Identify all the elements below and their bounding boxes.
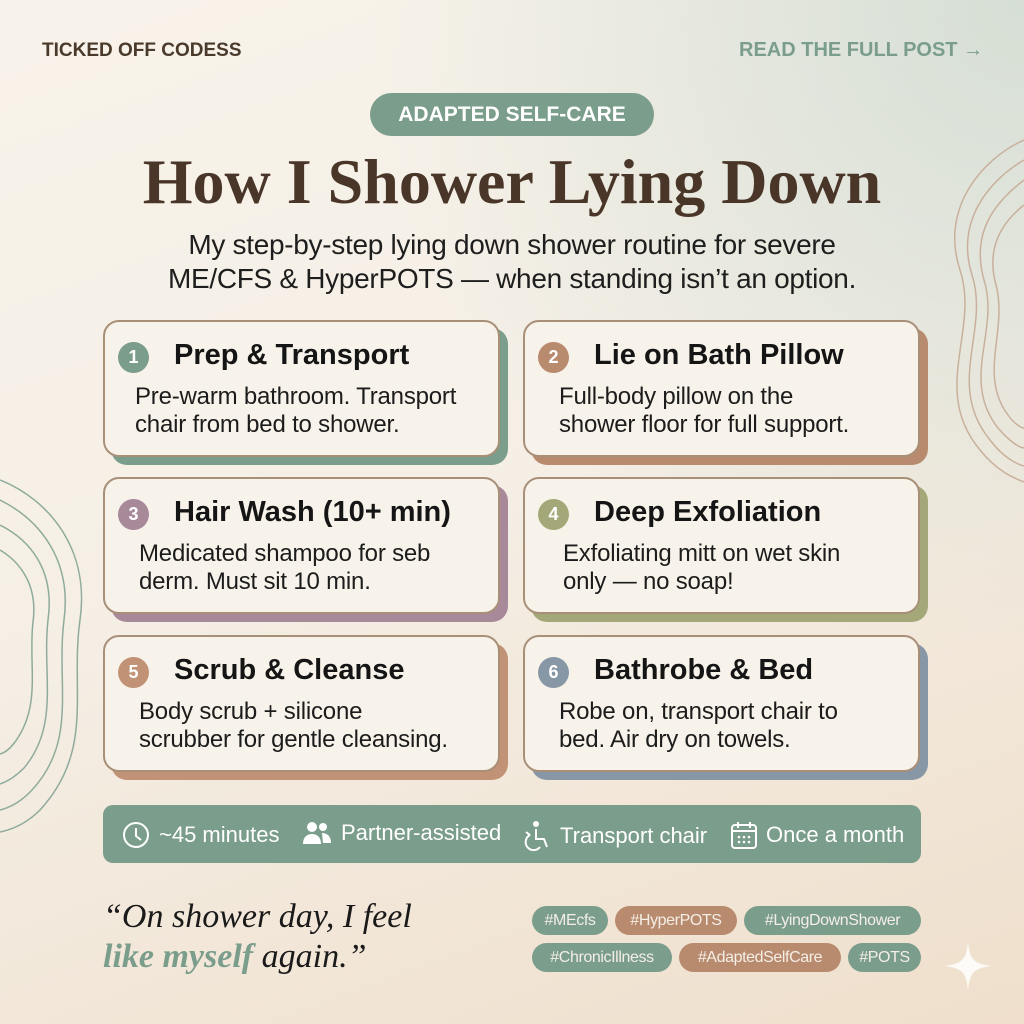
card 6: bed. Air dry on towels. bbox=[559, 726, 791, 753]
decorative wavy lines left bbox=[0, 479, 82, 833]
card 4: 4 bbox=[548, 504, 558, 524]
quote bbox=[103, 898, 412, 975]
card 3: 3 bbox=[128, 504, 138, 524]
hashtags: #AdaptedSelfCare bbox=[698, 949, 822, 966]
subtitle: My step-by-step lying down shower routine for severe bbox=[188, 229, 836, 260]
stat: calendar: Once a month bbox=[766, 822, 904, 847]
card 5: Body scrub + silicone bbox=[139, 698, 362, 725]
card 6: Robe on, transport chair to bbox=[559, 698, 838, 725]
stats bar bbox=[103, 805, 921, 863]
card 1: Pre-warm bathroom. Transport bbox=[135, 383, 456, 410]
subtitle bbox=[168, 229, 856, 294]
card 4: only — no soap! bbox=[563, 568, 733, 595]
card 5: scrubber for gentle cleansing. bbox=[139, 726, 448, 753]
stat: chair: Transport chair bbox=[560, 823, 707, 848]
card 3: derm. Must sit 10 min. bbox=[139, 568, 371, 595]
card 2: Lie on Bath Pillow bbox=[594, 339, 844, 371]
card 2 bbox=[523, 320, 920, 457]
hashtags: #HyperPOTS bbox=[630, 912, 722, 929]
card 1: Prep & Transport bbox=[174, 339, 409, 371]
sparkle icon bbox=[945, 943, 991, 989]
card 5: Scrub & Cleanse bbox=[174, 654, 404, 686]
card 1: chair from bed to shower. bbox=[135, 411, 399, 438]
hashtags: #MEcfs bbox=[545, 912, 595, 929]
card 6: 6 bbox=[548, 662, 558, 682]
card 4: Exfoliating mitt on wet skin bbox=[563, 540, 840, 567]
stat: time: ~45 minutes bbox=[159, 822, 279, 847]
card 3 bbox=[103, 477, 500, 614]
hashtags: #ChronicIllness bbox=[550, 949, 654, 966]
card 2: 2 bbox=[548, 347, 558, 367]
card 2: Full-body pillow on the bbox=[559, 383, 793, 410]
stat: partner: Partner-assisted bbox=[341, 820, 501, 845]
card 4 bbox=[523, 477, 920, 614]
hashtags: #LyingDownShower bbox=[765, 912, 900, 929]
stat: chair bbox=[524, 821, 707, 852]
quote: like myself again.” bbox=[103, 938, 366, 975]
card 6 bbox=[523, 635, 920, 772]
brand: TICKED OFF CODESS bbox=[42, 40, 242, 61]
card 4: Deep Exfoliation bbox=[594, 496, 821, 528]
card 3: Hair Wash (10+ min) bbox=[174, 496, 451, 528]
category pill bbox=[370, 93, 654, 136]
title: How I Shower Lying Down bbox=[143, 146, 881, 217]
card 6: Bathrobe & Bed bbox=[594, 654, 813, 686]
hashtags: #POTS bbox=[859, 949, 910, 966]
card 5 bbox=[103, 635, 500, 772]
card 5: 5 bbox=[128, 662, 138, 682]
decorative wavy lines right bbox=[954, 140, 1024, 482]
card 2: shower floor for full support. bbox=[559, 411, 849, 438]
card 3: Medicated shampoo for seb bbox=[139, 540, 430, 567]
card 1 bbox=[103, 320, 500, 457]
quote: “On shower day, I feel bbox=[103, 898, 412, 935]
read link: READ THE FULL POST → bbox=[739, 39, 983, 61]
card 1: 1 bbox=[128, 347, 138, 367]
category pill: ADAPTED SELF-CARE bbox=[398, 103, 626, 126]
subtitle: ME/CFS & HyperPOTS — when standing isn’t an option. bbox=[168, 263, 856, 294]
